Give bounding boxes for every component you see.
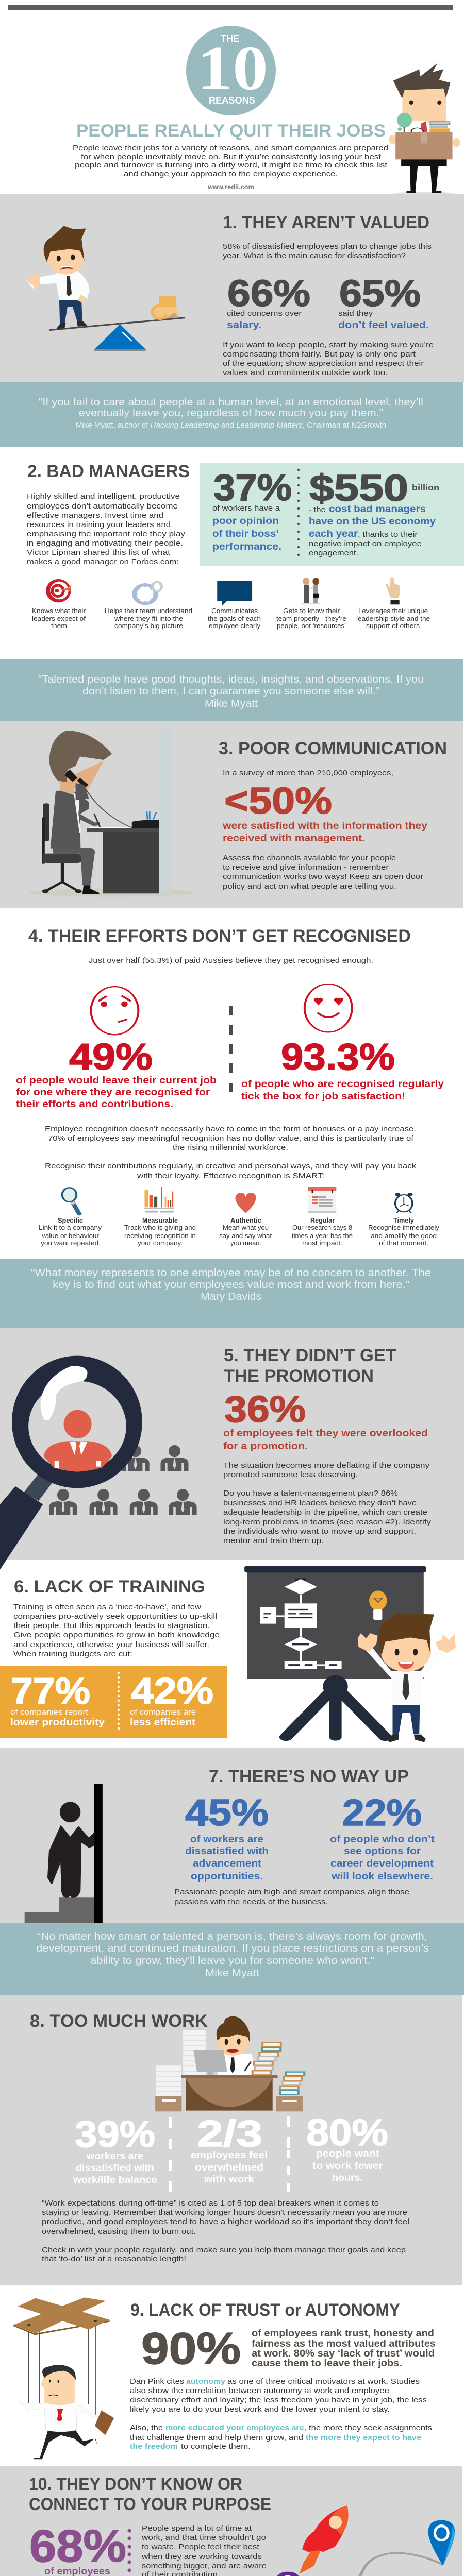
- body text: work, and that time shouldn’t go: [141, 2533, 266, 2542]
- body text: The situation becomes more deflating if the company: [223, 1461, 430, 1470]
- illustration: rocket and route pins: [275, 2505, 455, 2576]
- column: regular: [292, 1216, 353, 1247]
- advice: to receive and give information - remember: [223, 863, 389, 872]
- illustration: man blocked by wall: [25, 1784, 103, 1923]
- icon: magnifying glass: [62, 1188, 79, 1214]
- caption: gets to know: [276, 607, 346, 630]
- panel: reason 6: [0, 1566, 456, 1742]
- stat 42%: [130, 1671, 213, 1728]
- header: [73, 26, 460, 197]
- panel: reason 2: [27, 462, 464, 630]
- stat 90%: 90%: [141, 2324, 241, 2374]
- stat $550 billion: each year: [309, 529, 358, 539]
- heading 4: 4. THEIR EFFORTS DON’T GET RECOGNISED: [28, 926, 411, 946]
- stat 90%: of employees rank trust, honesty and: [252, 2328, 434, 2339]
- stat 37%: of their boss’: [212, 529, 279, 539]
- stat 65%: 65%: [339, 273, 421, 314]
- column: authentic: you mean.: [230, 1239, 261, 1247]
- heading 6: 6. LACK OF TRAINING: [14, 1577, 205, 1597]
- stat $550 billion: - the: [308, 505, 326, 514]
- stat 90%: [141, 2324, 436, 2374]
- body text: their people. But this approach leads to stagnation.: [13, 1621, 210, 1630]
- intro text: for when people inevitably move on. But if you’re consistently losing your best: [81, 152, 382, 161]
- column: timely: Recognise immediately: [368, 1224, 439, 1231]
- stat 22%: will look elsewhere.: [331, 1871, 433, 1882]
- body text: Highly skilled and intelligent, productive: [27, 492, 180, 501]
- panel: reason 7: [0, 1748, 464, 1923]
- website: www.redii.com: [207, 183, 254, 191]
- body text: makes a good manager on Forbes.com:: [27, 557, 179, 566]
- heading 10: 10. THEY DON’T KNOW OR: [29, 2475, 242, 2494]
- body text: likely you are to do your best work and the lower your intent to stay.: [130, 2405, 390, 2414]
- stat $550 billion: , thanks to their: [358, 530, 418, 539]
- stat 22%: [330, 1792, 435, 1882]
- stat 45%: of workers are: [190, 1834, 263, 1845]
- stat $550 billion: cost bad managers: [329, 504, 426, 515]
- stat 36%: of employees felt they were overlooked: [223, 1428, 428, 1439]
- icon: gears: [134, 582, 161, 605]
- icon: alarm clock: [395, 1193, 413, 1213]
- stat 2/3: overwhelmed: [195, 2162, 263, 2173]
- body text: Recognise their contributions regularly, in creative and personal ways, and they will pay you back: [45, 1162, 417, 1171]
- intro text: people and turnover is turning into a dirty word, it might be time to check this list: [75, 161, 388, 170]
- stat 42%: less efficient: [130, 1717, 196, 1728]
- column: specific: you want repeated.: [41, 1239, 101, 1247]
- stat $550 billion: billion: [412, 483, 439, 493]
- caption: knows: leaders expect of: [32, 615, 86, 622]
- quote band 4: ability to grow, they’ll leave you for someone who won’t.”: [90, 1955, 374, 1967]
- body text: adequate leadership in the pipeline, which can create: [223, 1508, 427, 1517]
- illustration: magnifier over staff: [0, 1356, 197, 1570]
- column: measurable: your company.: [138, 1239, 183, 1247]
- stat 2/3: employees feel: [191, 2150, 268, 2161]
- column: specific: value or behaviour: [42, 1232, 100, 1240]
- quote band 1: “If you fail to care about people at a human level, at an emotional level, they’ll: [39, 397, 423, 408]
- column: authentic: say and say what: [219, 1232, 272, 1240]
- stat 2/3: 2/3: [197, 2113, 262, 2155]
- body text: [223, 1461, 432, 1545]
- illustration: trainer at board: [244, 1566, 456, 1742]
- body text: Training is often seen as a ‘nice-to-have’, and few: [13, 1603, 201, 1612]
- intro: Just over half (55.3%) of paid Aussies believe they get recognised enough.: [89, 956, 373, 965]
- body text: overwhelmed, causing them to burn out.: [42, 2227, 196, 2236]
- stat 77%: lower productivity: [10, 1717, 105, 1728]
- intro text: year. What is the main cause for dissatisfaction?: [223, 251, 406, 260]
- caption: leverages: Leverages their unique: [358, 607, 428, 615]
- heading 7: 7. THERE’S NO WAY UP: [209, 1767, 409, 1786]
- body text: the freedom: [130, 2442, 178, 2451]
- caption: helps: where they fit into the: [114, 615, 183, 622]
- stat 80%: hours.: [332, 2173, 363, 2183]
- body text: the individuals who want to move up and support,: [223, 1527, 416, 1536]
- stat 77%: 77%: [11, 1671, 90, 1712]
- stat 66%: [227, 273, 310, 331]
- icon: bar chart: [144, 1187, 174, 1214]
- badge: the 10 reasons: 10: [197, 33, 268, 103]
- heading 10: [29, 2475, 271, 2514]
- column: authentic: [219, 1216, 272, 1247]
- quote band 4: development, and continued maturation. If you place restrictions on a person’s: [36, 1943, 429, 1954]
- stat 66%: salary.: [227, 320, 261, 331]
- caption: knows: them: [51, 622, 67, 630]
- quote band 4: Mike Myatt: [205, 1968, 259, 1979]
- stat 22%: see options for: [344, 1846, 421, 1857]
- body text: staying or leaving. Remember that working longer hours doesn’t necessarily mean you are more: [42, 2208, 407, 2217]
- body text: long-term problems in teams (see reason #2). Identify: [223, 1518, 432, 1527]
- panel: reason 8: [0, 1995, 462, 2285]
- body text: that challenge them and help them grow, and: [130, 2433, 303, 2442]
- stat 93.3%: of people who are recognised regularly: [241, 1079, 444, 1090]
- panel: reason 4: [16, 926, 444, 1247]
- stat 77%: of companies report: [10, 1708, 89, 1717]
- stat 77%: [10, 1671, 105, 1728]
- illustration: man on seesaw outweighed by coins: [26, 226, 185, 351]
- stat 22%: 22%: [342, 1792, 422, 1834]
- caption: leverages: [356, 607, 430, 630]
- badge: the 10 reasons: [186, 26, 276, 115]
- stat $550 billion: [308, 468, 439, 557]
- advice: Assess the channels available for your people: [223, 854, 396, 862]
- body text: also show the correlation between autonomy at work and employee: [130, 2386, 389, 2395]
- panel: reason 3: [0, 721, 463, 908]
- stat 80%: 80%: [306, 2112, 388, 2154]
- caption: gets to know: Gets to know their: [283, 607, 340, 615]
- body text: that ‘to-do’ list at a reasonable length!: [42, 2255, 186, 2263]
- stat 66%: 66%: [227, 273, 310, 314]
- stat 39%: work/life balance: [73, 2175, 157, 2185]
- stat 22%: of people who don’t: [330, 1834, 435, 1845]
- stat 37%: of workers have a: [212, 504, 280, 513]
- icon: happy face: [305, 984, 352, 1032]
- icon: calendar: [308, 1187, 336, 1213]
- body text: [42, 2199, 409, 2263]
- illustration: overwhelmed worker at desk: [155, 2016, 304, 2111]
- stat 36%: for a promotion.: [223, 1441, 308, 1452]
- icon: man carrying box: [389, 63, 460, 197]
- stat 45%: dissatisfied with: [185, 1846, 269, 1857]
- quote band 2: don’t listen to them, I can guarantee you someone else will.”: [82, 686, 379, 697]
- title: PEOPLE REALLY QUIT THEIR JOBS: [76, 121, 386, 141]
- stat 37%: 37%: [213, 467, 292, 509]
- stat 49%: their efforts and contributions.: [16, 1099, 173, 1110]
- stat 90%: cause them to leave their jobs.: [252, 2358, 402, 2369]
- stat $550 billion: $550: [309, 468, 408, 509]
- quote band 2: [0, 659, 463, 721]
- body text: Passionate people aim high and smart companies align those: [174, 1888, 409, 1896]
- body text: Give people opportunities to grow in both knowledge: [13, 1631, 220, 1639]
- stat 39%: dissatisfied with: [76, 2163, 154, 2174]
- icon: speech bubble: [217, 581, 252, 606]
- caption: communicates: employee clearly: [209, 622, 261, 630]
- divider: [229, 1006, 233, 1092]
- quote band 4: “No matter how smart or talented a person is, there’s always room for growth,: [37, 1931, 427, 1942]
- column: measurable: Track who is giving and: [124, 1224, 196, 1231]
- advice text: of the equation; show appreciation and respect their: [223, 359, 424, 368]
- body text: and experience, otherwise your business will suffer.: [13, 1640, 209, 1649]
- heading 5: 5. THEY DIDN’T GET: [224, 1346, 396, 1365]
- stat 45%: opportunities.: [191, 1871, 263, 1882]
- body text: [45, 1125, 417, 1180]
- quote band 3: Mary Davids: [201, 1291, 261, 1302]
- stat <50%: were satisfied with the information they: [222, 821, 427, 832]
- illustration: man on the phone at desk: [28, 728, 194, 897]
- stat 36%: 36%: [224, 1389, 306, 1430]
- body text: 70% of employees say meaningful recognition has no dollar value, and this is particularly true of: [48, 1134, 414, 1143]
- stat 49%: for one where they are recognised for: [16, 1087, 210, 1098]
- caption: helps: [105, 607, 192, 630]
- stat 45%: [185, 1792, 269, 1882]
- stat 37%: [212, 467, 292, 552]
- stat $550 billion: have on the US economy: [309, 516, 436, 527]
- icon: heart: [235, 1193, 256, 1213]
- advice text: values and commitments outside work too.: [223, 368, 388, 377]
- column: timely: Timely: [393, 1216, 415, 1224]
- body text: companies pro-actively seek opportunities to up-skill: [13, 1612, 217, 1621]
- body text: the more they expect to have: [306, 2433, 421, 2442]
- quote band 3: [0, 1259, 464, 1328]
- divider: [169, 2117, 172, 2192]
- heading 10: CONNECT TO YOUR PURPOSE: [29, 2495, 271, 2514]
- heading 5: THE PROMOTION: [224, 1366, 374, 1386]
- stat 93.3%: [241, 1037, 444, 1102]
- quote band 1: eventually leave you, regardless of how much you pay them.”: [79, 408, 383, 419]
- stat <50%: [222, 781, 427, 844]
- stat $550 billion: engagement.: [309, 549, 358, 557]
- stat 45%: advancement: [193, 1858, 262, 1869]
- stat 37%: poor opinion: [212, 516, 279, 527]
- caption: helps: company’s big picture: [114, 622, 183, 630]
- column: regular: times a year has the: [292, 1232, 353, 1240]
- body text: Check in with your people regularly, and make sure you help them manage their goals and keep: [42, 2246, 406, 2255]
- column: regular: Regular: [310, 1216, 335, 1224]
- advice: [223, 854, 423, 891]
- column: timely: [368, 1216, 439, 1247]
- stat <50%: <50%: [224, 781, 332, 822]
- intro text: 58% of dissatisfied employees plan to change jobs this: [223, 242, 432, 251]
- stat 90%: fairness as the most valued attributes: [252, 2338, 436, 2349]
- quote band 1: [0, 382, 463, 447]
- column: measurable: Measurable: [142, 1216, 178, 1224]
- column: authentic: Mean what you: [223, 1224, 269, 1231]
- advice: communication works two ways! Keep an open door: [223, 872, 423, 881]
- column: timely: and amplify the good: [371, 1232, 437, 1240]
- body text: Dan Pink cites: [130, 2377, 184, 2386]
- column: specific: Specific: [58, 1216, 83, 1224]
- caption: gets to know: people, not ‘resources’: [277, 622, 346, 630]
- caption: leverages: leadership style and the: [356, 615, 430, 622]
- stat 36%: [223, 1389, 428, 1452]
- heading 9: 9. LACK OF TRUST or AUTONOMY: [130, 2300, 400, 2320]
- stat 39%: [73, 2114, 157, 2185]
- panel: reason 1: [0, 194, 464, 382]
- body text: mentor and train them up.: [223, 1536, 324, 1545]
- body text: [27, 492, 186, 566]
- stat 93.3%: 93.3%: [281, 1037, 395, 1078]
- stat 66%: cited concerns over: [227, 309, 302, 318]
- heading 3: 3. POOR COMMUNICATION: [219, 739, 447, 758]
- stat 49%: 49%: [69, 1037, 153, 1078]
- panel: reason 10: [0, 2466, 462, 2576]
- stat 49%: [16, 1037, 217, 1110]
- body text: to waste. People feel their best: [142, 2543, 260, 2551]
- body text: employees don’t automatically become: [27, 502, 178, 511]
- caption: communicates: [208, 607, 261, 630]
- stat 90%: at work. 80% say ‘lack of trust’ would: [252, 2348, 435, 2359]
- stat 49%: of people would leave their current job: [16, 1075, 217, 1086]
- badge: the 10 reasons: THE: [221, 33, 239, 44]
- body text: discretionary effort and loyalty; the less freedom you have in your job, the less: [130, 2396, 427, 2404]
- stat 37%: performance.: [212, 541, 281, 552]
- stat 68%: 68%: [29, 2520, 126, 2571]
- stat <50%: received with management.: [223, 833, 365, 844]
- stat 65%: [338, 273, 429, 331]
- column: regular: Our research says 8: [292, 1224, 352, 1231]
- stat $550 billion: negative impact on employee: [309, 539, 422, 548]
- intro text: [223, 242, 432, 260]
- body text: the rising millennial workforce.: [173, 1143, 288, 1152]
- column: specific: [39, 1216, 102, 1247]
- intro text: People leave their jobs for a variety of reasons, and smart companies are prepared: [73, 144, 388, 152]
- caption: leverages: support of others: [366, 622, 420, 630]
- quote band 4: [0, 1923, 464, 1995]
- intro text: and change your approach to the employee experience.: [124, 170, 338, 178]
- advice: policy and act on what people are telling you.: [223, 882, 396, 891]
- body text: emphasising the important role they play: [27, 530, 186, 538]
- caption: communicates: Communicates: [211, 607, 258, 615]
- body text: [141, 2524, 271, 2576]
- quote band 2: “Talented people have good thoughts, ideas, insights, and observations. If you: [38, 674, 424, 685]
- stat 65%: said they: [338, 309, 373, 318]
- divider: [287, 2116, 290, 2192]
- body text: [174, 1888, 409, 1906]
- column: regular: most impact.: [302, 1239, 342, 1247]
- caption: helps: Helps their team understand: [105, 607, 192, 615]
- body text: as one of three critical motivators at work. Studies: [227, 2377, 420, 2386]
- stats panel: [200, 463, 464, 566]
- body text: businesses and HR leaders believe they don’t have: [223, 1499, 417, 1507]
- body text: [130, 2377, 432, 2451]
- advice text: compensating them fairly. But pay is only one part: [223, 350, 416, 359]
- heading 2: 2. BAD MANAGERS: [27, 462, 190, 481]
- icon cuff: [390, 600, 400, 604]
- column: measurable: [124, 1216, 196, 1247]
- heading 1: 1. THEY AREN’T VALUED: [223, 213, 429, 232]
- quote band 2: Mike Myatt: [205, 698, 258, 709]
- caption: communicates: the goals of each: [208, 615, 261, 622]
- stat 39%: workers are: [86, 2151, 143, 2162]
- body text: Employee recognition doesn’t necessarily have to come in the form of bonuses or a pay increase.: [45, 1125, 416, 1133]
- column: authentic: Authentic: [230, 1216, 261, 1224]
- badge: the 10 reasons: REASONS: [209, 95, 255, 106]
- icon: pointing hand: [386, 577, 400, 598]
- body text: passions with the needs of the business.: [174, 1897, 328, 1906]
- intro: In a survey of more than 210,000 employees,: [223, 769, 393, 777]
- stat 42%: of companies are: [130, 1708, 196, 1717]
- stat 80%: people want: [316, 2148, 380, 2159]
- stat 80%: to work fewer: [312, 2161, 384, 2172]
- stat 2/3: with work: [204, 2174, 254, 2185]
- top bar: [8, 5, 453, 10]
- stat 42%: 42%: [131, 1671, 213, 1712]
- body text: more educated your employees are,: [165, 2424, 306, 2432]
- body text: productive, and good employees tend to have a higher workload so it’s important they don’t feel: [42, 2217, 409, 2226]
- panel: reason 9: [13, 2297, 436, 2459]
- body text: promoted someone less deserving.: [223, 1470, 358, 1479]
- body text: Victor Lipman shared this list of what: [27, 548, 171, 557]
- column: specific: Link it to a company: [39, 1224, 102, 1231]
- stat 39%: 39%: [75, 2114, 155, 2155]
- icon: target: [46, 579, 72, 602]
- caption: gets to know: team properly - they’re: [276, 615, 346, 622]
- quote band 3: “What money represents to one employee may be of no concern to another. The: [31, 1267, 431, 1279]
- intro text: [73, 144, 388, 178]
- caption: knows: Knows what their: [32, 607, 86, 615]
- body text: resources in training your leaders and: [27, 520, 171, 529]
- body text: When training budgets are cut:: [13, 1650, 132, 1658]
- quote band 1: Mike Myatt, author of Hacking Leadership and Leadership Matters, Chairman at N2Growth: [76, 421, 386, 430]
- caption: knows: [32, 607, 86, 630]
- body text: autonomy: [186, 2377, 226, 2386]
- column: timely: of that moment.: [379, 1239, 428, 1247]
- heading 5: [224, 1346, 396, 1386]
- stat 22%: career development: [330, 1858, 434, 1869]
- icon: handshake: [301, 578, 321, 604]
- column: measurable: receiving recognition in: [124, 1232, 196, 1240]
- body text: with their loyalty. Effective recognition is SMART:: [137, 1172, 324, 1180]
- stat 2/3: [191, 2113, 268, 2185]
- body text: the more they seek assignments: [309, 2424, 432, 2432]
- heading 8: 8. TOO MUCH WORK: [30, 2011, 208, 2031]
- body text: Do you have a talent-management plan? 86%: [223, 1489, 398, 1498]
- stat 80%: [306, 2112, 388, 2183]
- stat 45%: 45%: [185, 1792, 269, 1834]
- illustration: puppet employee: [13, 2297, 114, 2459]
- body text: People spend a lot of time at: [142, 2524, 252, 2533]
- panel: reason 5: [0, 1328, 464, 1570]
- advice text: If you want to keep people, start by making sure you’re: [223, 341, 434, 349]
- stats panel: [0, 1666, 227, 1738]
- stat 65%: don’t feel valued.: [338, 320, 429, 331]
- body text: effective managers. Invest time and: [27, 511, 163, 520]
- stat 93.3%: tick the box for job satisfaction!: [241, 1091, 405, 1102]
- body text: “Work expectations during off-time” is cited as 1 of 5 top deal breakers when it comes to: [42, 2199, 379, 2208]
- advice text: [223, 341, 434, 377]
- body text: when they are working towards: [141, 2552, 262, 2561]
- body text: in engaging and motivating their people.: [27, 539, 183, 548]
- body text: something bigger, and are aware: [142, 2562, 267, 2570]
- body text: [13, 1603, 220, 1658]
- body text: to complete them.: [181, 2442, 251, 2451]
- icon: sad face: [91, 987, 138, 1035]
- quote band 3: key is to find out what your employees value most and work from here.”: [53, 1279, 409, 1291]
- body text: Also, the: [130, 2424, 163, 2432]
